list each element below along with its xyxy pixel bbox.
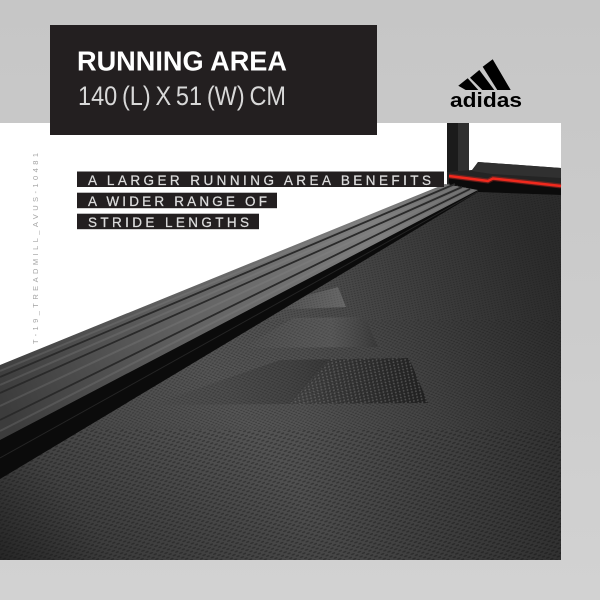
dimensions: 140 (L) X 51 (W) CM <box>78 81 286 111</box>
header box <box>50 25 377 135</box>
adidas logo <box>450 59 522 112</box>
running belt <box>0 190 561 560</box>
heading: running area: RUNNING AREA <box>77 46 287 76</box>
benefit line 1: A LARGER RUNNING AREA BENEFITS <box>88 173 431 188</box>
adidas stripes printed on belt <box>150 287 428 405</box>
benefit line 2: A WIDER RANGE OF <box>88 194 267 209</box>
benefit text strips <box>77 172 444 230</box>
benefit line 3: STRIDE LENGTHS <box>88 215 249 230</box>
side rail <box>0 184 480 479</box>
treadmill console with red light <box>447 162 561 197</box>
treadmill upright post <box>447 123 469 175</box>
white photo panel <box>0 123 561 560</box>
vertical product code: T-19_TREADMILL_AVUS-10481 <box>31 153 40 344</box>
adidas wordmark: adidas <box>450 90 522 112</box>
